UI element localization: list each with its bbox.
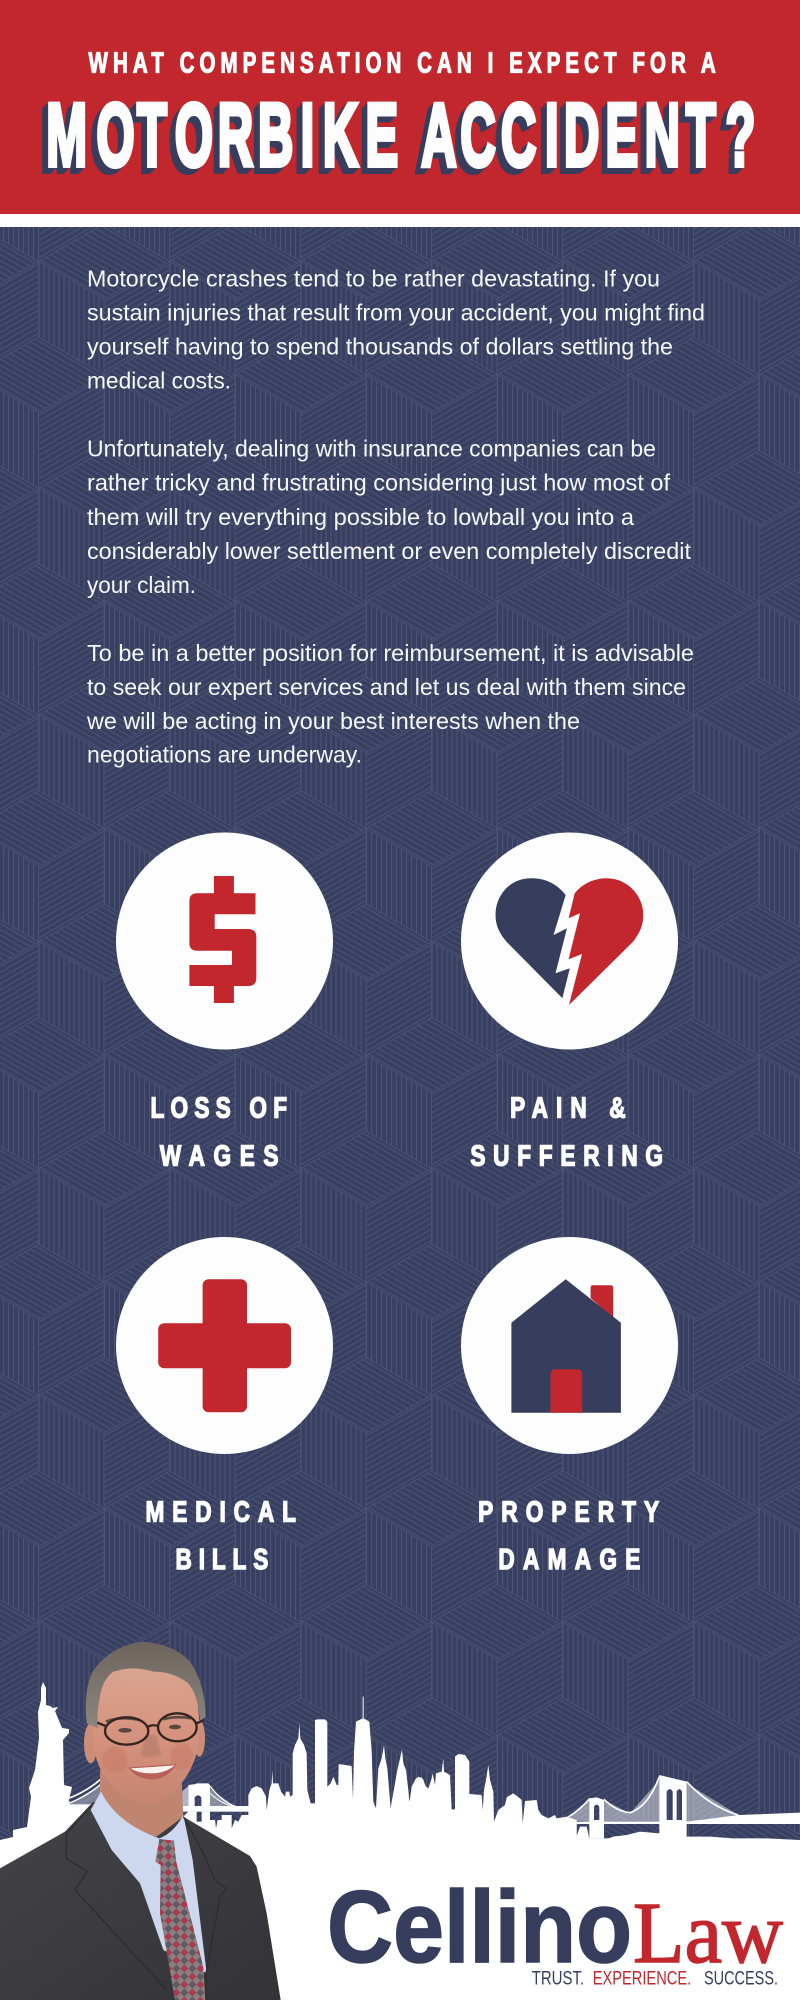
label: pain and suffering: SUFFERING xyxy=(470,1139,663,1172)
panel: loss of wages xyxy=(116,832,333,1172)
eyes xyxy=(118,1728,132,1733)
intro paragraph 1: sustain injuries that result from your accident, you might find xyxy=(87,300,705,326)
nose shadow xyxy=(140,1735,162,1757)
smile xyxy=(128,1764,177,1779)
shirt collar and front xyxy=(91,1792,207,1973)
intro paragraph 2: them will try everything possible to lowball you into a xyxy=(87,504,634,530)
main title with extruded shadow: MOTORBIKE ACCIDENT? xyxy=(42,90,751,189)
wordmark Law: Law xyxy=(633,1884,783,1981)
tagline: EXPERIENCE. xyxy=(593,1968,691,1990)
city skyline silhouette xyxy=(0,1682,800,2000)
label: loss of wages: WAGES xyxy=(160,1139,278,1172)
lapels xyxy=(66,1807,226,2000)
label: loss of wages xyxy=(151,1091,287,1172)
tagline: TRUST. xyxy=(532,1968,584,1990)
intro paragraph 1: yourself having to spend thousands of dollars settling the xyxy=(87,334,673,360)
tagline: SUCCESS. xyxy=(704,1968,778,1990)
icon: medical cross in circle xyxy=(116,1237,333,1454)
label: property damage: DAMAGE xyxy=(498,1542,640,1576)
label: medical bills: BILLS xyxy=(175,1542,268,1576)
intro paragraph 3 xyxy=(86,640,694,768)
main title with extruded shadow: MOTORBIKE ACCIDENT? xyxy=(40,92,749,191)
right skyline xyxy=(400,1749,577,1853)
portrait of attorney xyxy=(0,1642,281,2000)
intro paragraph 3: negotiations are underway. xyxy=(87,742,362,768)
intro paragraph 2 xyxy=(87,436,692,598)
header banner xyxy=(0,0,800,227)
suit jacket xyxy=(0,1802,281,2000)
tagline xyxy=(532,1968,778,1990)
label: medical bills: MEDICAL xyxy=(145,1495,296,1528)
panel: property damage xyxy=(461,1237,678,1576)
header kicker text: WHAT COMPENSATION CAN I EXPECT FOR A xyxy=(89,48,716,79)
intro paragraph 3: To be in a better position for reimbursement, it is advisable xyxy=(87,640,694,666)
main title with extruded shadow: MOTORBIKE ACCIDENT? xyxy=(46,86,755,185)
glasses xyxy=(97,1713,204,1745)
label: property damage xyxy=(478,1495,659,1576)
left bridge xyxy=(68,1778,108,1853)
label: loss of wages: LOSS OF xyxy=(151,1091,287,1124)
label: medical bills xyxy=(145,1495,296,1576)
main title with extruded shadow: MOTORBIKE ACCIDENT? xyxy=(44,88,753,187)
wordmark Cellino: Cellino xyxy=(327,1870,632,1984)
icon: broken heart in circle xyxy=(461,832,678,1050)
intro paragraph 2: rather tricky and frustrating considering just how most of xyxy=(87,470,671,496)
logo: Cellino Law xyxy=(327,1870,783,1990)
eyebrows xyxy=(106,1717,191,1722)
panel: pain and suffering xyxy=(461,832,678,1172)
label: property damage: PROPERTY xyxy=(478,1495,659,1528)
panel: medical bills xyxy=(116,1237,333,1576)
icon: house in circle xyxy=(461,1237,678,1454)
head xyxy=(84,1642,206,1804)
intro paragraph 3: we will be acting in your best interests when the xyxy=(86,708,580,734)
intro paragraph 1: medical costs. xyxy=(87,367,231,393)
intro paragraph 2: considerably lower settlement or even completely discredit xyxy=(87,538,692,564)
icon: statue of liberty xyxy=(0,1682,110,1860)
label: pain and suffering xyxy=(470,1091,663,1172)
intro paragraph 2: Unfortunately, dealing with insurance companies can be xyxy=(87,436,656,462)
right bridge and waterfront xyxy=(543,1775,800,1860)
central skyline xyxy=(180,1697,440,1880)
intro paragraph 2: your claim. xyxy=(87,572,196,598)
necktie xyxy=(155,1839,205,2000)
neck xyxy=(100,1770,183,1837)
intro paragraph 3: to seek our expert services and let us deal with them since xyxy=(87,674,686,700)
label: pain and suffering: PAIN & xyxy=(510,1091,626,1124)
intro paragraph 1 xyxy=(87,266,705,393)
intro paragraph 1: Motorcycle crashes tend to be rather devastating. If you xyxy=(87,266,660,292)
cheeks and brow shading xyxy=(102,1743,193,1773)
icon: dollar sign in circle xyxy=(116,832,333,1050)
hair xyxy=(86,1642,206,1728)
